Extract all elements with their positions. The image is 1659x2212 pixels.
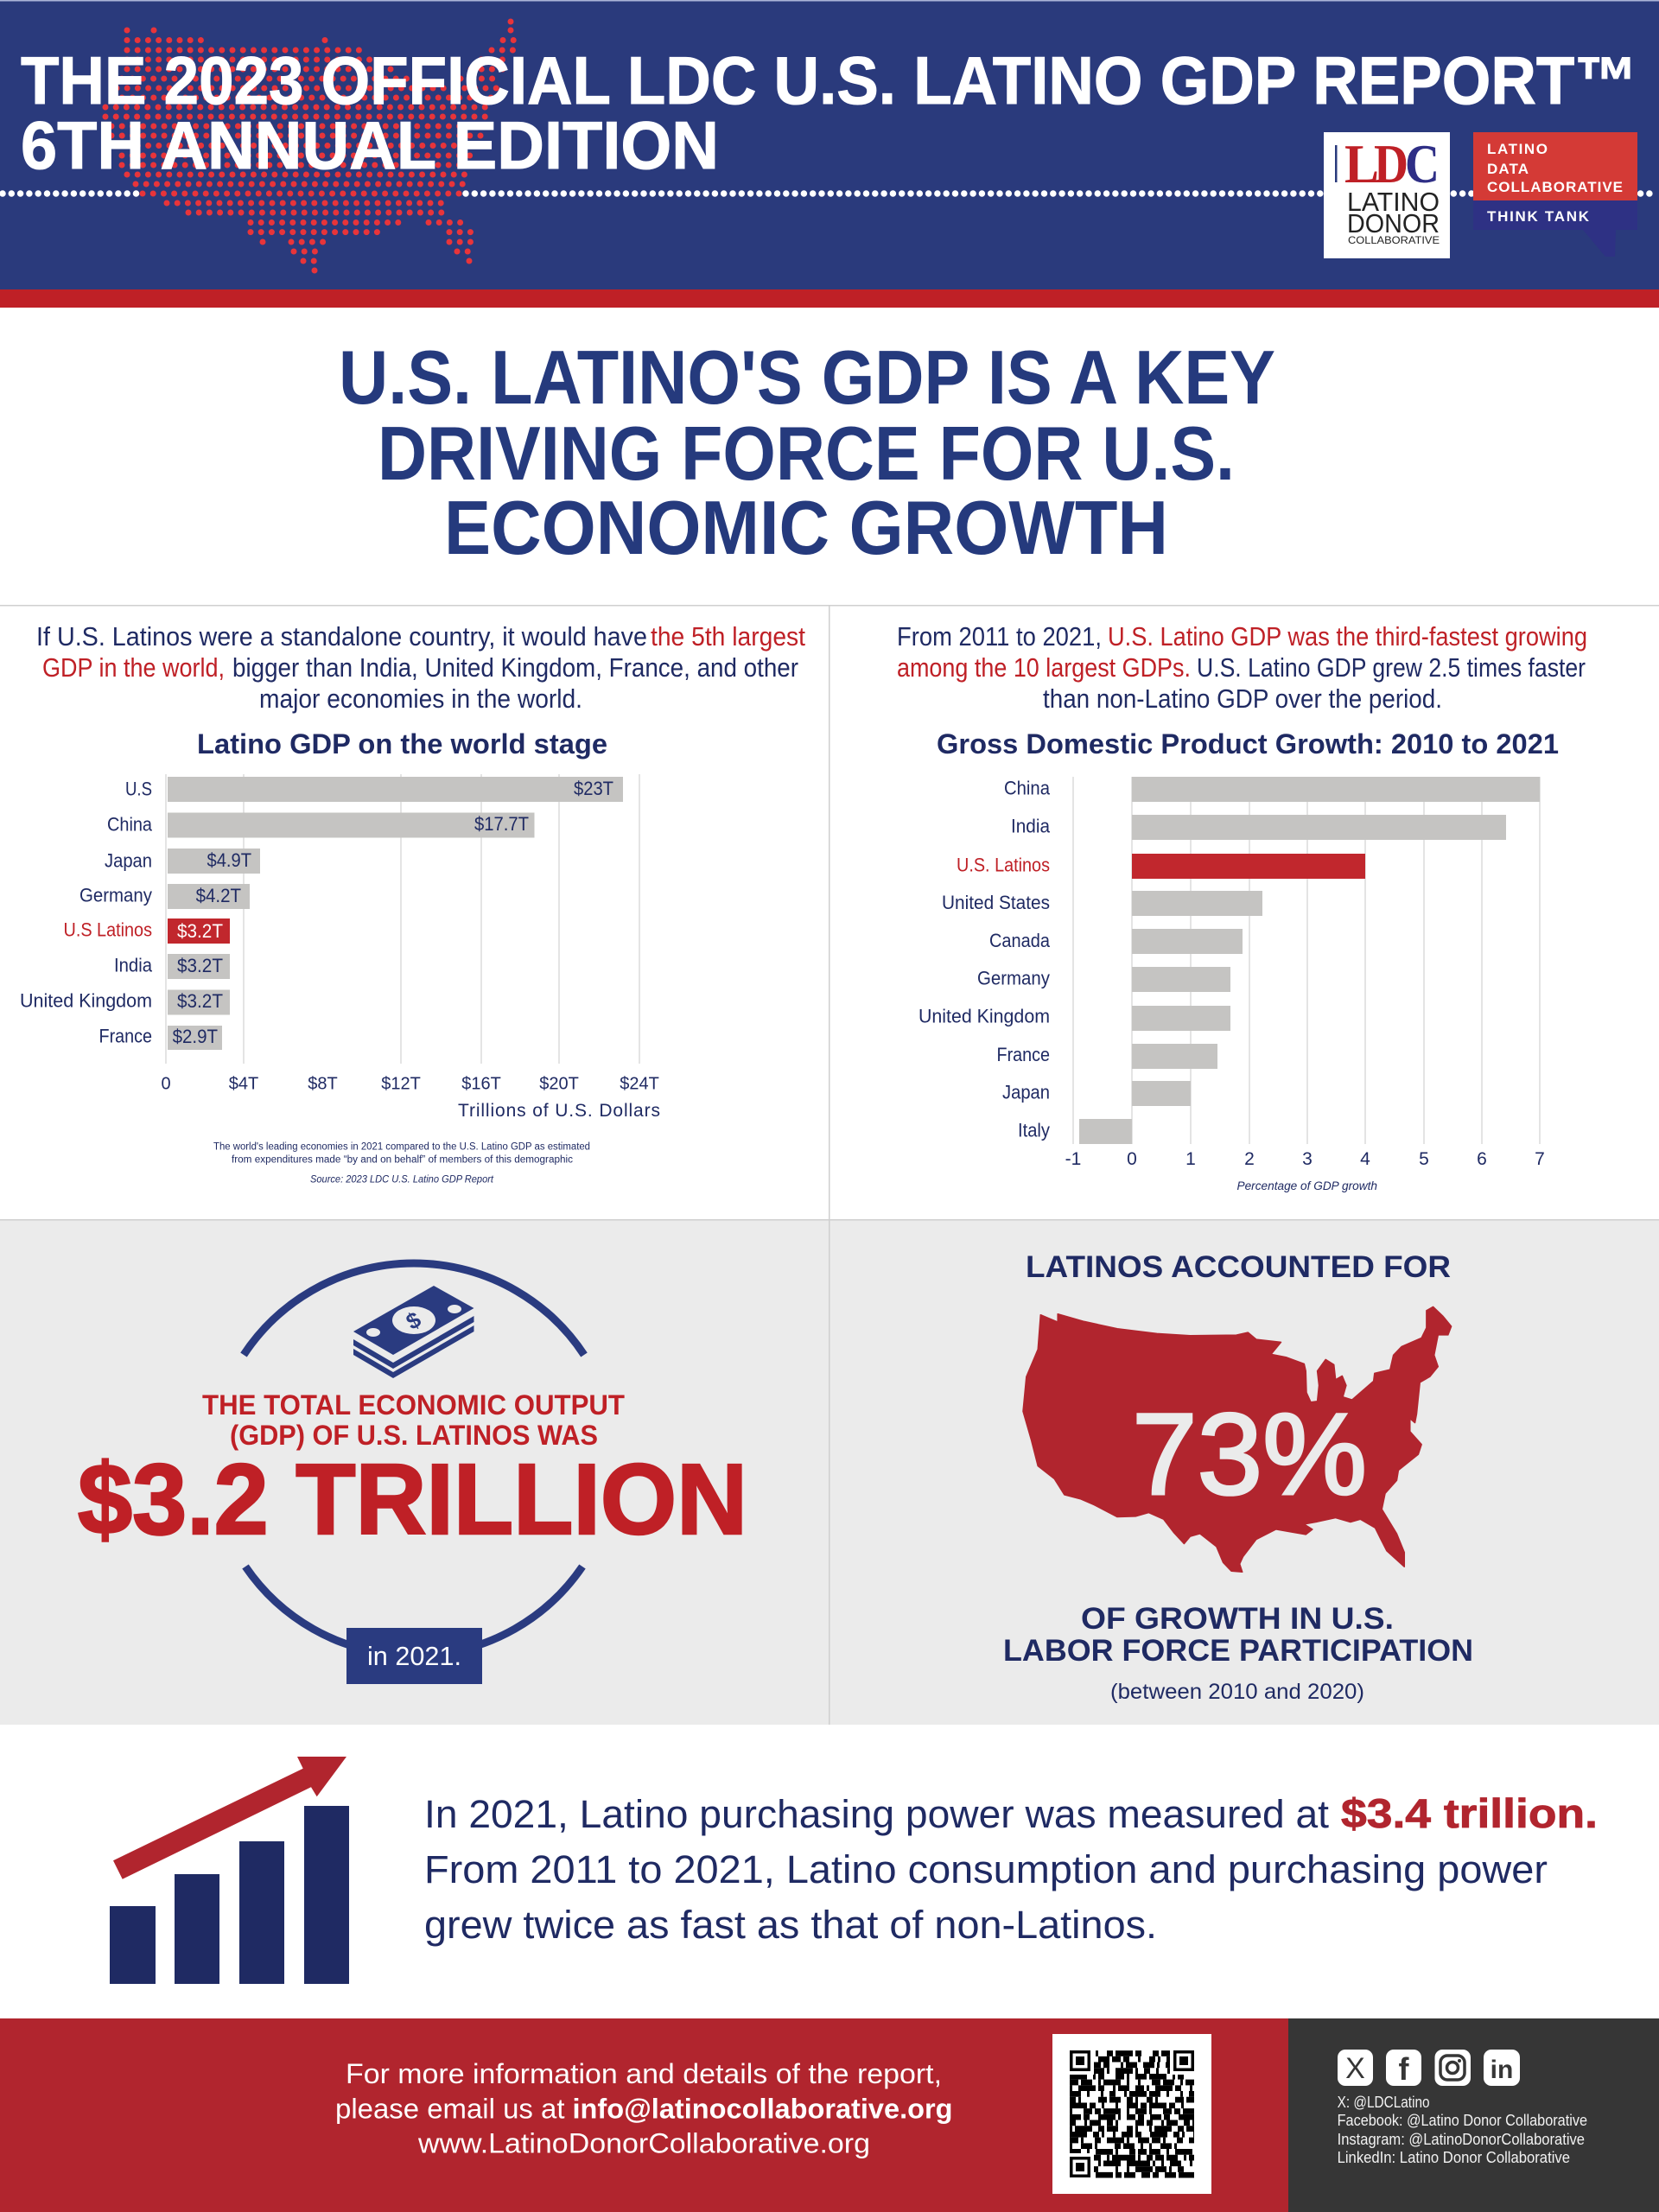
bar chart: GDP by economy: Germany bbox=[79, 885, 152, 906]
intro text: left: bigger than India, United Kingdom, France, and other bbox=[232, 652, 798, 683]
social handles: Facebook: @Latino Donor Collaborative bbox=[1338, 2112, 1587, 2129]
social handles: LinkedIn: Latino Donor Collaborative bbox=[1338, 2149, 1570, 2166]
icon: Instagram bbox=[1434, 2050, 1471, 2086]
bar chart: GDP by economy: $3.2T bbox=[177, 920, 223, 942]
bar chart: GDP by economy: $3.2T bbox=[177, 955, 223, 976]
main heading bbox=[339, 334, 1275, 570]
bar chart: GDP by economy: 0 bbox=[161, 1075, 171, 1094]
chart title: GDP growth: Gross Domestic Product Growth: 2010 to 2021 bbox=[937, 728, 1559, 760]
bar chart: GDP by economy: $4T bbox=[229, 1075, 258, 1094]
social handles: X: @LDCLatino bbox=[1338, 2094, 1430, 2111]
social handles: Instagram: @LatinoDonorCollaborative bbox=[1338, 2131, 1585, 2148]
panel: labor force bbox=[1003, 1250, 1473, 1704]
bar chart: GDP by economy: $17.7T bbox=[474, 813, 529, 835]
chart note and source: Source: 2023 LDC U.S. Latino GDP Report bbox=[310, 1175, 494, 1185]
bar chart: GDP growth by economy: 3 bbox=[1302, 1149, 1313, 1169]
bar chart: GDP by economy: United Kingdom bbox=[20, 990, 152, 1011]
logo: Latino Donor Collaborative: C bbox=[1405, 133, 1440, 194]
bar chart: GDP by economy: $2.9T bbox=[173, 1026, 218, 1047]
bar chart: GDP by economy: $8T bbox=[308, 1075, 338, 1094]
social handles bbox=[1338, 2094, 1587, 2166]
logo: Latino Donor Collaborative: L bbox=[1344, 133, 1379, 194]
logo: Latino Donor Collaborative: COLLABORATIVE bbox=[1348, 234, 1440, 246]
chart note and source bbox=[213, 1142, 590, 1185]
panel: GDP growth bbox=[897, 621, 1587, 1192]
bar chart: GDP growth by economy: France bbox=[997, 1044, 1050, 1065]
bar chart: GDP growth by economy: Italy bbox=[1018, 1120, 1050, 1141]
bar chart: GDP by economy: Trillions of U.S. Dollars bbox=[458, 1101, 660, 1121]
bar chart: GDP by economy: Japan bbox=[105, 850, 152, 871]
bar chart: GDP by economy: China bbox=[107, 814, 153, 835]
icon: X: X bbox=[1345, 2052, 1365, 2085]
output text bbox=[202, 1389, 625, 1451]
bar chart: GDP by economy: $20T bbox=[539, 1075, 579, 1094]
footer: social panel bbox=[1288, 2018, 1659, 2212]
bar chart: GDP by economy: $16T bbox=[461, 1075, 501, 1094]
logo: Latino Donor Collaborative: DONOR bbox=[1347, 208, 1440, 238]
icon: LinkedIn: in bbox=[1491, 2056, 1513, 2084]
U.S. map with 73% bbox=[1023, 1306, 1452, 1572]
bar chart: GDP by economy: $4.9T bbox=[207, 849, 251, 871]
purchasing power text: grew twice as fast as that of non-Latinos. bbox=[424, 1903, 1157, 1947]
bar chart: GDP by economy: India bbox=[114, 954, 153, 976]
icon: X bbox=[1338, 2050, 1373, 2086]
circle arcs bbox=[244, 1263, 584, 1656]
main heading: DRIVING FORCE FOR U.S. bbox=[378, 410, 1235, 496]
intro text: right: U.S. Latino GDP grew 2.5 times faster bbox=[1197, 652, 1586, 683]
bar chart: GDP growth by economy: 4 bbox=[1360, 1149, 1370, 1169]
intro text: right: U.S. Latino GDP was the third-fastest growing bbox=[1108, 621, 1587, 652]
panel: total economic output bbox=[78, 1263, 747, 1684]
bar chart: GDP growth by economy bbox=[918, 777, 1545, 1169]
panel: world stage GDP bbox=[20, 621, 805, 1185]
big number: $3.2 trillion: $3.2 TRILLION bbox=[78, 1443, 747, 1555]
bar chart: GDP growth by economy: Germany bbox=[977, 968, 1050, 988]
bar chart: GDP growth by economy: India bbox=[1011, 816, 1051, 836]
QR code bbox=[1052, 2034, 1211, 2194]
chart title: Latino GDP on the world stage: Latino GDP on the world stage bbox=[197, 728, 607, 760]
bar chart: GDP growth by economy: China bbox=[1004, 778, 1051, 798]
icon: Facebook: f bbox=[1398, 2051, 1410, 2087]
purchasing power text: From 2011 to 2021, Latino consumption and purchasing power bbox=[424, 1847, 1548, 1891]
purchasing power text: In 2021, Latino purchasing power was measured at bbox=[424, 1792, 1329, 1836]
intro text: right: than non-Latino GDP over the period. bbox=[1043, 683, 1442, 714]
icon: stack of money: $ bbox=[402, 1306, 426, 1335]
bar chart: GDP by economy: $24T bbox=[620, 1075, 659, 1094]
purchasing power text: $3.4 trillion. bbox=[1341, 1790, 1598, 1836]
icon: LinkedIn bbox=[1484, 2050, 1520, 2086]
bar chart: GDP growth by economy: 2 bbox=[1244, 1149, 1255, 1169]
logo: Latino Data Collaborative think tank bbox=[1473, 132, 1637, 257]
bar chart: GDP growth by economy: 1 bbox=[1185, 1149, 1196, 1169]
bar chart: GDP growth by economy: United States bbox=[942, 892, 1050, 913]
intro text: right: among the 10 largest GDPs. bbox=[897, 652, 1191, 683]
bar chart: GDP growth by economy: -1 bbox=[1065, 1149, 1081, 1169]
bar chart: GDP by economy: $3.2T bbox=[177, 990, 223, 1012]
labor text: LABOR FORCE PARTICIPATION bbox=[1003, 1634, 1473, 1668]
main heading: ECONOMIC GROWTH bbox=[444, 485, 1168, 570]
bar chart: GDP growth by economy: Canada bbox=[989, 930, 1051, 951]
labor text: (between 2010 and 2020) bbox=[1110, 1680, 1364, 1704]
footer: contact: For more information and details of the report, bbox=[346, 2058, 942, 2089]
chart note and source: from expenditures made “by and on behalf” of members of this demographic bbox=[232, 1154, 573, 1165]
bar chart: GDP growth by economy: 6 bbox=[1477, 1149, 1487, 1169]
header title: 6TH ANNUAL EDITION bbox=[21, 107, 719, 183]
bar chart: GDP by economy: France bbox=[99, 1025, 152, 1047]
logo: Latino Data Collaborative think tank: LATINO bbox=[1487, 141, 1548, 157]
icon: Facebook bbox=[1386, 2050, 1421, 2087]
bar chart: GDP growth by economy: 5 bbox=[1419, 1149, 1429, 1169]
U.S. map with 73%: 73% bbox=[1132, 1390, 1367, 1519]
icon: stack of money bbox=[353, 1286, 474, 1378]
bar chart: GDP by economy: $23T bbox=[574, 778, 613, 799]
logo: Latino Data Collaborative think tank: DATA bbox=[1487, 161, 1529, 177]
logo: Latino Donor Collaborative: LATINO bbox=[1347, 187, 1440, 217]
main heading: U.S. LATINO'S GDP IS A KEY bbox=[339, 334, 1275, 420]
bar chart: GDP growth by economy: 0 bbox=[1127, 1149, 1137, 1169]
header banner bbox=[0, 0, 1659, 308]
purchasing power text bbox=[424, 1790, 1598, 1947]
intro text: left bbox=[36, 621, 805, 714]
header title bbox=[21, 42, 1637, 183]
bar chart: GDP by economy bbox=[20, 774, 660, 1121]
output text: THE TOTAL ECONOMIC OUTPUT bbox=[202, 1389, 625, 1421]
logo: Latino Donor Collaborative bbox=[1324, 132, 1450, 258]
icon: growth bars with arrow bbox=[110, 1757, 349, 1984]
intro text: left: If U.S. Latinos were a standalone country, it would have bbox=[36, 621, 647, 652]
labor heading: LATINOS ACCOUNTED FOR bbox=[1026, 1250, 1451, 1284]
section background and dividers bbox=[0, 605, 1659, 1725]
logo: Latino Data Collaborative think tank: COLLABORATIVE bbox=[1487, 179, 1623, 195]
footer: contact: info@latinocollaborative.org bbox=[572, 2093, 952, 2124]
footer: contact bbox=[0, 2018, 1288, 2212]
intro text: left: major economies in the world. bbox=[259, 683, 582, 714]
axis caption: Percentage of GDP growth bbox=[1237, 1179, 1377, 1192]
bar chart: GDP by economy: $4.2T bbox=[196, 885, 241, 906]
logo: Latino Data Collaborative think tank: THINK TANK bbox=[1487, 208, 1590, 225]
dotted U.S. map bbox=[105, 22, 521, 270]
logo: Latino Donor Collaborative: D bbox=[1374, 133, 1408, 194]
bar chart: GDP growth by economy: U.S. Latinos bbox=[957, 854, 1050, 876]
chart note and source: The world's leading economies in 2021 compared to the U.S. Latino GDP as estimated bbox=[213, 1142, 590, 1153]
dotted rule bbox=[3, 190, 1656, 197]
intro text: left: the 5th largest bbox=[651, 621, 805, 652]
intro text: left: GDP in the world, bbox=[42, 652, 225, 683]
panel: purchasing power bbox=[110, 1757, 1598, 1984]
bar chart: GDP growth by economy: Japan bbox=[1002, 1082, 1050, 1103]
bar chart: GDP by economy: U.S bbox=[125, 778, 152, 800]
bar chart: GDP growth by economy: United Kingdom bbox=[918, 1006, 1050, 1027]
bar chart: GDP by economy: U.S Latinos bbox=[64, 919, 152, 940]
intro text: right: From 2011 to 2021, bbox=[897, 621, 1102, 652]
labor text bbox=[1003, 1602, 1473, 1704]
footer: contact: please email us at bbox=[335, 2093, 565, 2124]
output text: (GDP) OF U.S. LATINOS WAS bbox=[230, 1420, 598, 1451]
bar chart: GDP growth by economy: 7 bbox=[1535, 1149, 1545, 1169]
year tag bbox=[346, 1628, 482, 1684]
footer: contact: www.LatinoDonorCollaborative.org bbox=[417, 2127, 870, 2158]
labor text: OF GROWTH IN U.S. bbox=[1081, 1602, 1394, 1636]
year tag: in 2021. bbox=[367, 1641, 461, 1671]
intro text: right bbox=[897, 621, 1587, 714]
bar chart: GDP by economy: $12T bbox=[381, 1075, 421, 1094]
